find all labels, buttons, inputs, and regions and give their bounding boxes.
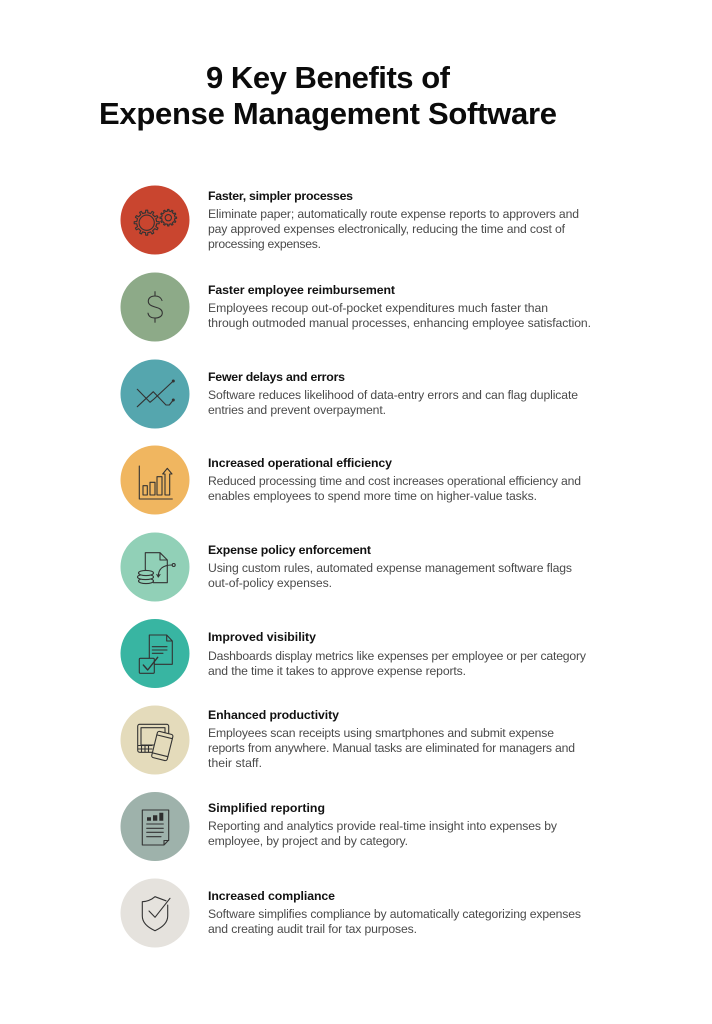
text: enhanced productivity: Enhanced productivity xyxy=(208,708,339,722)
text: increased operational efficiency: enables employees to spend more time on higher-value tasks. xyxy=(208,489,537,503)
text: improved visibility: and the time it takes to approve expense reports. xyxy=(208,664,466,678)
text: faster employee reimbursement xyxy=(208,283,591,330)
item: faster employee reimbursement xyxy=(120,272,591,342)
text: fewer delays and errors: Software reduces likelihood of data-entry errors and can flag duplicate xyxy=(208,388,578,402)
text: increased compliance xyxy=(208,889,581,936)
text: increased operational efficiency xyxy=(208,456,581,503)
item: simplified reporting xyxy=(120,792,558,861)
text: faster employee reimbursement: Employees recoup out-of-pocket expenditures much faster than xyxy=(208,301,548,315)
text: faster, simpler processes: Faster, simpler processes xyxy=(208,189,353,203)
text: faster employee reimbursement: Faster employee reimbursement xyxy=(208,283,395,297)
text: fewer delays and errors: entries and prevent overpayment. xyxy=(208,403,386,417)
icon: report document on grey-green circle xyxy=(120,792,190,861)
text: expense policy enforcement: Expense policy enforcement xyxy=(208,543,371,557)
title: Expense Management Software xyxy=(99,96,557,131)
text: increased compliance: and creating audit trail for tax purposes. xyxy=(208,922,417,936)
text: expense policy enforcement: out-of-policy expenses. xyxy=(208,576,332,590)
item: increased compliance xyxy=(120,878,581,948)
icon: gears on red circle xyxy=(120,186,190,254)
text: faster, simpler processes: processing expenses. xyxy=(208,237,321,251)
text: improved visibility: Improved visibility xyxy=(208,630,316,644)
text: fewer delays and errors xyxy=(208,370,578,417)
icon: shield with check on light grey circle xyxy=(120,878,190,948)
text: faster employee reimbursement: through outmoded manual processes, enhancing employee satisfaction. xyxy=(208,316,591,330)
title xyxy=(99,60,557,131)
text: faster, simpler processes: Eliminate paper; automatically route expense reports to approvers and xyxy=(208,207,579,221)
text: enhanced productivity: Employees scan receipts using smartphones and submit expense xyxy=(208,726,554,740)
icon: tablet and phone on beige circle xyxy=(120,706,190,774)
text: enhanced productivity xyxy=(208,708,575,770)
text: simplified reporting: Simplified reporting xyxy=(208,801,325,815)
text: simplified reporting xyxy=(208,801,558,848)
icon: bar chart on orange circle xyxy=(120,446,190,514)
item: faster, simpler processes xyxy=(120,186,579,254)
icon: document and coins on mint circle xyxy=(120,532,190,602)
text: simplified reporting: employee, by project and by category. xyxy=(208,834,408,848)
text: faster, simpler processes xyxy=(208,189,579,251)
item: increased operational efficiency xyxy=(120,446,581,514)
item: fewer delays and errors xyxy=(120,360,578,428)
text: increased operational efficiency: Reduced processing time and cost increases operational efficiency and xyxy=(208,474,581,488)
item: expense policy enforcement xyxy=(120,532,572,602)
title: 9 Key Benefits of xyxy=(206,60,451,95)
text: simplified reporting: Reporting and analytics provide real-time insight into expenses by xyxy=(208,819,558,833)
text: faster, simpler processes: pay approved expenses electronically, reducing the time and cost of xyxy=(208,222,566,236)
text: increased compliance: Software simplifies compliance by automatically categorizing expenses xyxy=(208,907,581,921)
text: improved visibility: Dashboards display metrics like expenses per employee or per category xyxy=(208,649,587,663)
text: enhanced productivity: reports from anywhere. Manual tasks are eliminated for managers and xyxy=(208,741,575,755)
text: increased operational efficiency: Increased operational efficiency xyxy=(208,456,392,470)
text: fewer delays and errors: Fewer delays and errors xyxy=(208,370,345,384)
text: expense policy enforcement xyxy=(208,543,572,590)
icon: dollar on green circle xyxy=(120,272,190,342)
item: improved visibility xyxy=(120,619,587,688)
icon: document with checkbox on teal circle xyxy=(120,619,190,688)
text: enhanced productivity: their staff. xyxy=(208,756,262,770)
icon: crossing trend lines on teal circle xyxy=(120,360,190,428)
text: expense policy enforcement: Using custom rules, automated expense management software flags xyxy=(208,561,572,575)
text: improved visibility xyxy=(208,630,587,678)
text: increased compliance: Increased compliance xyxy=(208,889,335,903)
item: enhanced productivity xyxy=(120,706,575,774)
